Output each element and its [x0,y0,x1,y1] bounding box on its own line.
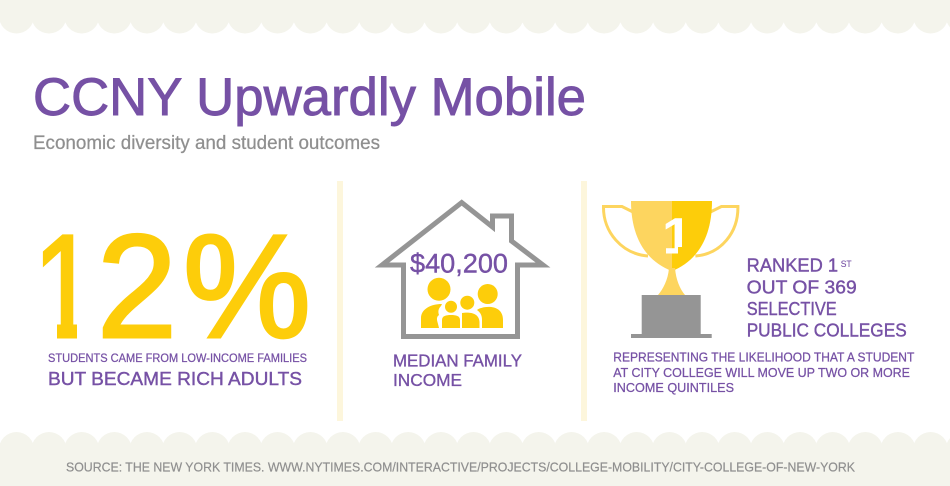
caption: low-income families: STUDENTS CAME FROM LOW-INCOME FAMILIES [48,351,307,365]
source line: SOURCE: THE NEW YORK TIMES. WWW.NYTIMES.COM/INTERACTIVE/PROJECTS/COLLEGE-MOBILITY/CITY-COLLEGE-OF-NEW-YORK [66,460,855,475]
big number: 12%: 2 [97,205,177,369]
panel: 12 percent statistic [42,232,308,386]
ranking explanation [613,351,915,395]
ranking explanation: AT CITY COLLEGE WILL MOVE UP TWO OR MORE [613,366,910,380]
icon: family [421,278,503,328]
income figure: $40,200 [410,248,508,278]
icon: trophy [603,201,738,338]
label: median family income [393,351,522,390]
ranking explanation: REPRESENTING THE LIKELIHOOD THAT A STUDENT [613,351,915,365]
big number: 12%: 1 [33,205,97,369]
ranking headline: RANKED 1 [747,256,838,276]
top scalloped band [0,0,950,34]
ranking headline: ST [841,259,852,269]
ranking explanation: INCOME QUINTILES [613,381,734,395]
ranking headline [747,256,907,341]
panel: ranking [603,201,915,395]
icon: trophy: 1 [662,207,692,264]
label: median family income: INCOME [393,370,462,390]
ranking headline: PUBLIC COLLEGES [747,321,907,341]
ranking headline: SELECTIVE [747,299,837,319]
title: CCNY Upwardly Mobile [33,68,586,127]
subtitle: Economic diversity and student outcomes [33,133,380,154]
bottom scalloped band [0,432,950,486]
panel: median family income [382,202,543,390]
icon: house outline [382,202,543,336]
big number: 12% [42,232,308,340]
caption: rich adults: BUT BECAME RICH ADULTS [48,369,302,389]
big number: 12%: % [183,205,311,369]
ranking headline: OUT OF 369 [747,277,857,297]
label: median family income: MEDIAN FAMILY [393,351,522,371]
